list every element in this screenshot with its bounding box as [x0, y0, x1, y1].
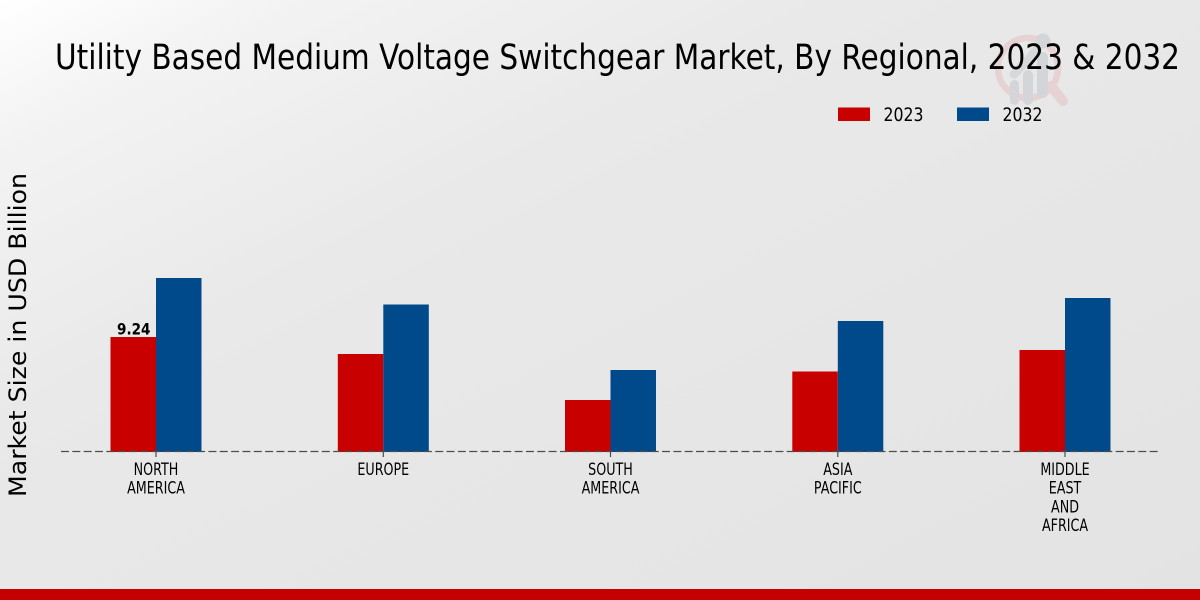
legend item: 2032: [957, 104, 1042, 126]
bar group: North America: [110, 278, 202, 452]
legend item: 2023: 2023: [884, 104, 924, 126]
label: Asia Pacific: PACIFIC: [814, 479, 862, 498]
label: South America: SOUTH: [588, 460, 633, 479]
label: North America: AMERICA: [127, 479, 185, 498]
bar group: Middle East and Africa: [1020, 298, 1110, 452]
icon: watermark magnifier with bars: [998, 34, 1063, 105]
legend item: 2023: [838, 104, 924, 126]
x axis baseline: [61, 452, 1158, 457]
label: Middle East and Africa: AND: [1051, 498, 1079, 517]
label: Asia Pacific: ASIA: [823, 460, 852, 479]
bottom red band: [0, 589, 1200, 600]
y axis label: Market Size in USD Billion: [4, 173, 32, 497]
label: Middle East and Africa: AFRICA: [1042, 517, 1088, 536]
bar group: Asia Pacific: [792, 321, 883, 452]
label: South America: AMERICA: [582, 479, 639, 498]
label: Europe: EUROPE: [357, 460, 409, 479]
label: Middle East and Africa: MIDDLE: [1040, 460, 1090, 479]
legend item: 2032: 2032: [1002, 104, 1042, 126]
x axis labels: [127, 460, 1090, 536]
bar group: Europe: [338, 304, 429, 452]
bar group: South America: [565, 370, 656, 452]
data label: 9.24: 9.24: [117, 320, 150, 338]
label: North America: NORTH: [134, 460, 178, 479]
label: Middle East and Africa: EAST: [1049, 479, 1082, 498]
legend: [838, 104, 1042, 126]
